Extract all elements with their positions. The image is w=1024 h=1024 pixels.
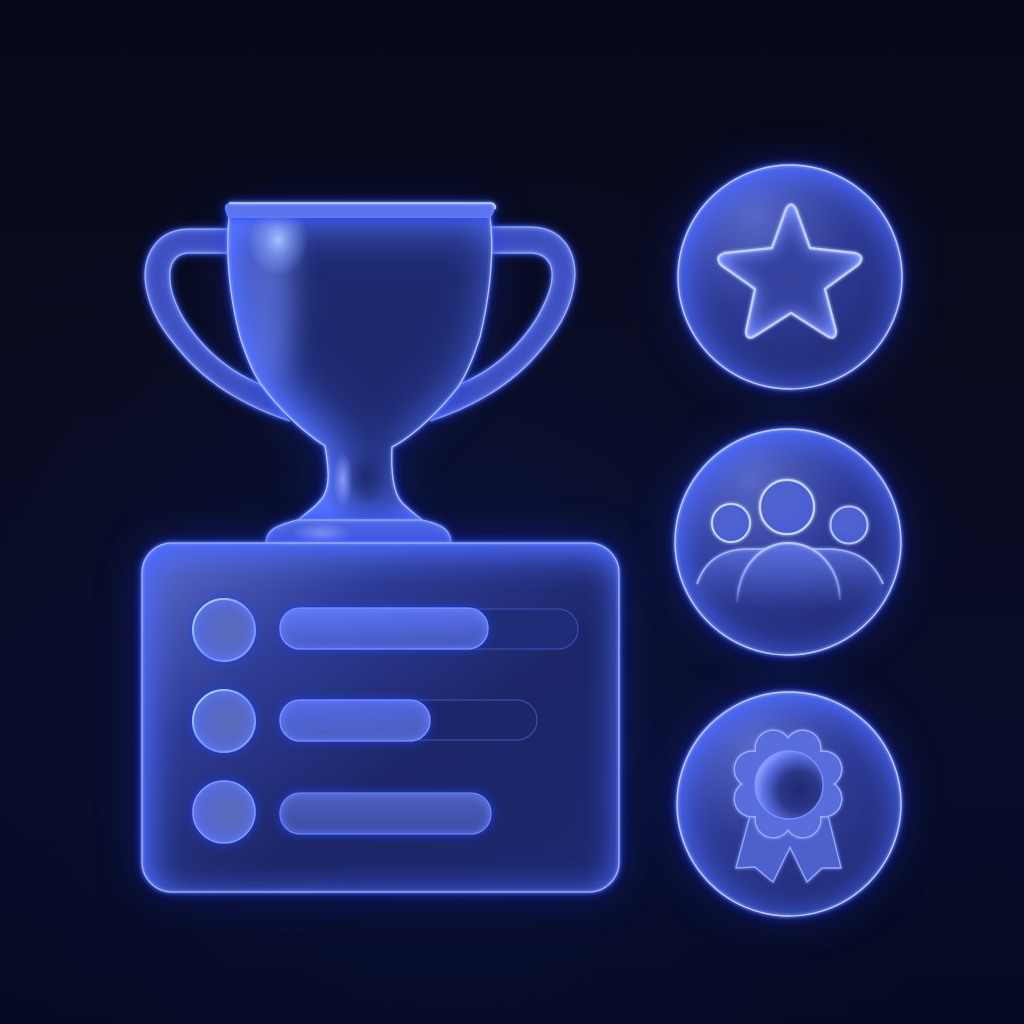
trophy (145, 200, 575, 546)
trophy foot (266, 520, 451, 546)
avatar 2 (193, 690, 255, 752)
side bodies (697, 549, 883, 612)
row 1 (193, 599, 578, 661)
panel body (142, 543, 619, 892)
cup rim (225, 203, 495, 218)
bar 2 (280, 700, 430, 741)
trophy cup and stem (228, 200, 492, 520)
right handle (430, 227, 575, 421)
badge: star (678, 165, 902, 389)
ribbons (736, 812, 841, 882)
heads (712, 504, 750, 542)
leaderboard panel (142, 543, 619, 892)
track 1 (280, 609, 578, 649)
center body (737, 543, 840, 610)
badge: award rosette (677, 692, 901, 916)
rosette center (755, 751, 823, 819)
row 2 (193, 690, 537, 752)
rosette petals (734, 730, 842, 838)
bar 1 (280, 608, 488, 649)
track 2 (280, 700, 537, 740)
icon: team of three people (697, 480, 883, 612)
icon: star (718, 204, 861, 338)
cup left sheen (248, 200, 386, 508)
row 3 (193, 781, 491, 843)
bar 3 (280, 793, 491, 834)
icon: rosette with ribbons (734, 730, 842, 882)
avatar 1 (193, 599, 255, 661)
avatar 3 (193, 781, 255, 843)
left handle (145, 229, 290, 421)
badge: team (675, 429, 901, 655)
